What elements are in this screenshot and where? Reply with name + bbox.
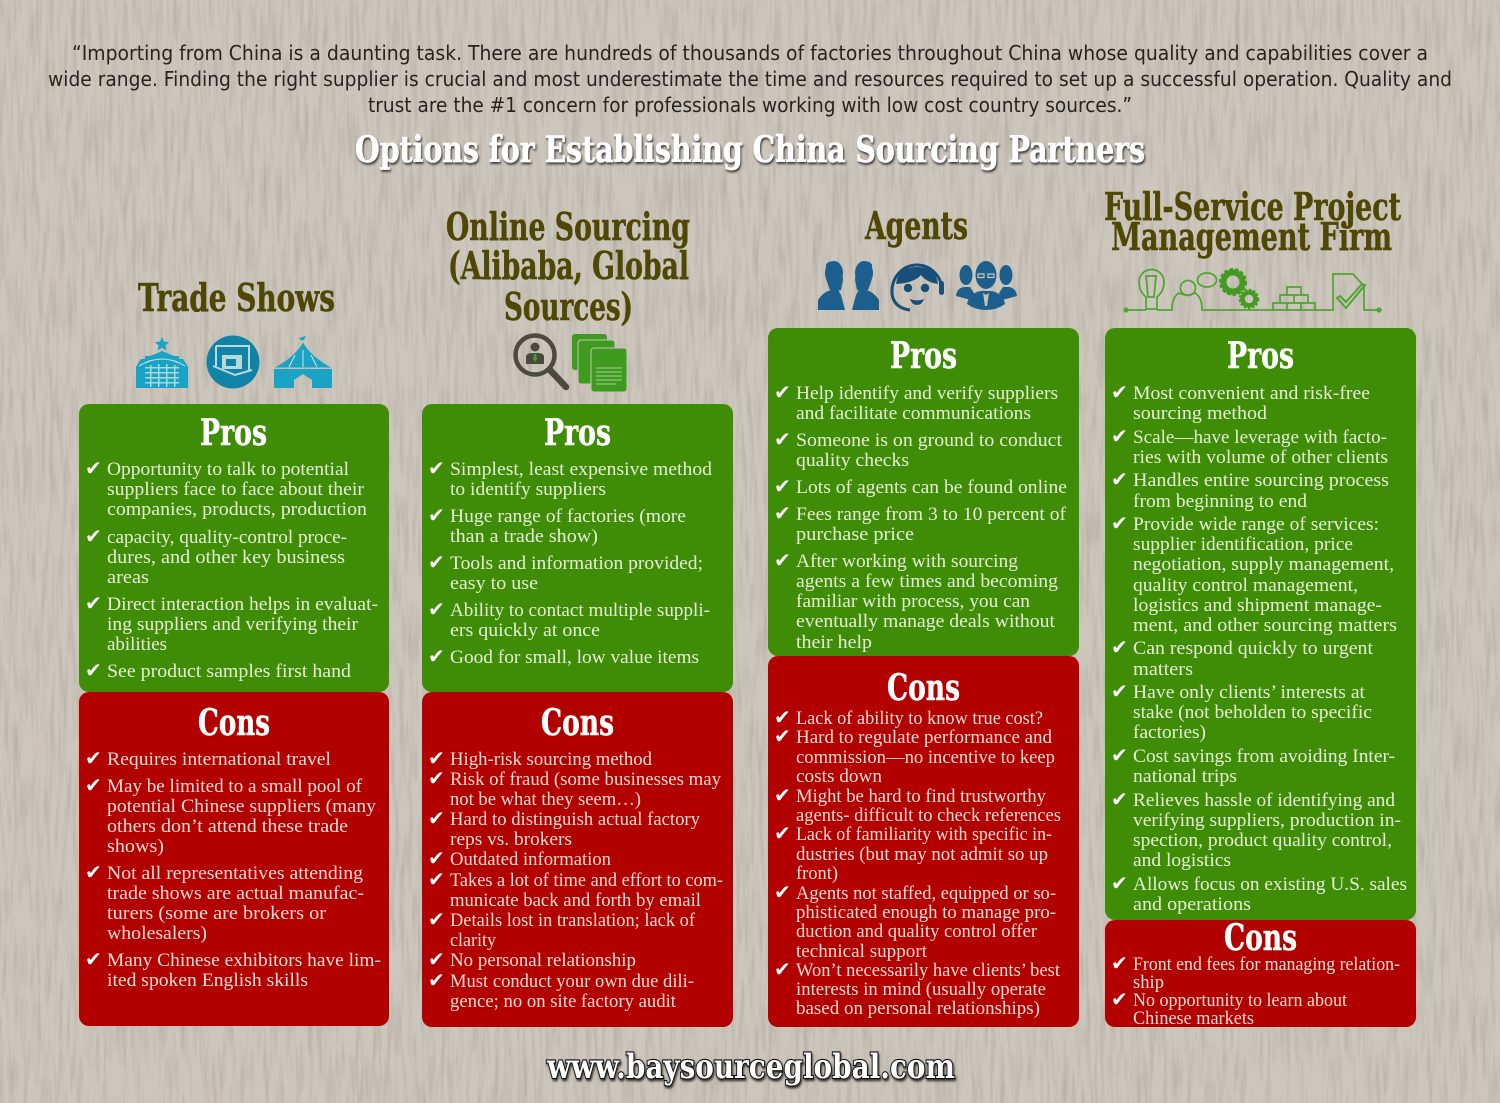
list: Project Management Firm pros: sourcing method [1133,404,1268,424]
list: Project Management Firm pros: ✔ [1111,787,1128,811]
list: Online Sourcing cons: No personal relationship [450,951,636,971]
list: Project Management Firm pros: ✔ [1111,380,1128,404]
list: Online Sourcing cons: ✔ [428,907,445,931]
list: Project Management Firm pros: ries with volume of other clients [1133,448,1388,468]
list: Trade Shows cons: ✔ [85,947,102,971]
list: Online Sourcing pros [428,456,713,668]
list: Project Management Firm pros: Most convenient and risk-free [1133,384,1370,404]
list: Agents pros: ✔ [774,427,791,451]
heading: Cons: Cons [198,702,270,744]
list: Online Sourcing cons: ✔ [428,766,445,790]
list: Agents pros: quality checks [796,451,909,471]
list: Project Management Firm cons: ✔ [1111,987,1128,1011]
list: Agents cons: agents- difficult to check references [796,806,1061,826]
icon: tent [274,336,332,388]
list: Trade Shows pros: suppliers face to face about their [107,480,364,500]
list: Agents pros: ✔ [774,548,791,572]
list: Agents cons: ✔ [774,783,791,807]
list: Agents pros: their help [796,633,872,653]
list: Online Sourcing cons: clarity [450,931,497,951]
icon: magnifier with person [516,336,566,387]
list: Agents cons: ✔ [774,957,791,981]
heading: Pros: Pros [1227,335,1294,377]
list: Trade Shows pros: ✔ [85,658,102,682]
heading: Online Sourcing: Online Sourcing [446,204,690,249]
list: Project Management Firm pros: ment, and other sourcing matters [1133,616,1397,636]
list: Agents cons: ✔ [774,821,791,845]
list: Online Sourcing cons: ✔ [428,846,445,870]
list: Online Sourcing cons: ✔ [428,947,445,971]
list: Trade Shows cons: trade shows are actual manufac- [107,884,364,904]
list: Project Management Firm pros: stake (not beholden to specific [1133,703,1372,723]
panel: Project Management Firm cons [1105,917,1416,1029]
list: Project Management Firm pros: quality control management, [1133,576,1358,596]
list: Project Management Firm pros: Scale—have leverage with facto- [1133,428,1387,448]
list: Agents pros: ✔ [774,474,791,498]
list: Online Sourcing pros: Tools and information provided; [450,554,703,574]
icon: team of three [956,261,1017,310]
list: Project Management Firm pros: ✔ [1111,871,1128,895]
main title: Options for Establishing China Sourcing Partners [355,129,1145,171]
list: Project Management Firm pros: negotiation, supply management, [1133,555,1394,575]
list: Online Sourcing cons: High-risk sourcing method [450,750,653,770]
list: Project Management Firm pros: Relieves hassle of identifying and [1133,791,1396,811]
list: Trade Shows pros: capacity, quality-control proce- [107,528,347,548]
panel: Online Sourcing pros [422,404,733,692]
heading: Online Sourcing [446,204,690,329]
panel: Trade Shows cons [79,692,389,1026]
list: Online Sourcing pros: ✔ [428,597,445,621]
list: Online Sourcing cons: Takes a lot of time and effort to com- [450,871,723,891]
list: Agents pros: agents a few times and becoming [796,572,1058,592]
list: Project Management Firm pros: and logistics [1133,851,1231,871]
icon: two business people [818,261,879,310]
panel: Online Sourcing cons [422,692,733,1027]
list: Agents cons: Won’t necessarily have clients’ best [796,961,1061,981]
list: Agents cons: based on personal relationships) [796,999,1040,1019]
icon: exhibition hall [136,337,188,388]
list: Trade Shows cons: wholesalers) [107,924,207,944]
list: Trade Shows cons [85,746,381,991]
icon: headset operator [892,265,944,310]
list: Agents pros: Someone is on ground to conduct [796,431,1063,451]
list: Online Sourcing pros: ers quickly at once [450,621,600,641]
list: Trade Shows cons: ited spoken English skills [107,971,308,991]
list: Project Management Firm pros: ✔ [1111,635,1128,659]
list: Trade Shows pros: areas [107,568,149,588]
list: Agents cons: costs down [796,767,882,787]
list: Agents cons: ✔ [774,705,791,729]
list: Agents cons [774,705,1061,1019]
list: Online Sourcing pros: to identify suppliers [450,480,606,500]
heading: Trade Shows: Trade Shows [138,275,335,320]
list: Trade Shows cons: May be limited to a small pool of [107,777,363,797]
icon: documents [572,334,627,392]
list: Project Management Firm pros: ✔ [1111,424,1128,448]
list: Project Management Firm pros: and operations [1133,895,1251,915]
heading: Full-Service Project Management Firm [1104,184,1401,259]
list: Online Sourcing cons: not be what they seem…) [450,790,641,810]
list: Trade Shows cons: Not all representatives attending [107,864,363,884]
list: Agents pros [774,380,1067,653]
list: Agents pros: eventually manage deals without [796,612,1056,632]
list: Trade Shows cons: potential Chinese suppliers (many [107,797,377,817]
heading: Cons: Cons [1224,917,1297,959]
list: Agents pros: familiar with process, you can [796,592,1030,612]
list: Agents cons: Might be hard to find trustworthy [796,787,1047,807]
list: Project Management Firm pros: Handles entire sourcing process [1133,471,1389,491]
list: Trade Shows pros: companies, products, production [107,500,367,520]
list: Project Management Firm pros: verifying suppliers, production in- [1133,811,1401,831]
list: Agents cons: front) [796,864,838,884]
list: Agents cons: technical support [796,942,928,962]
list: Trade Shows cons: ✔ [85,773,102,797]
list: Trade Shows pros: ✔ [85,524,102,548]
icon: booth circle [206,336,260,388]
list: Project Management Firm pros: ✔ [1111,743,1128,767]
list: Trade Shows pros: See product samples first hand [107,662,352,682]
list: Trade Shows cons: shows) [107,837,164,857]
panel: Agents pros [768,328,1079,656]
list: Project Management Firm pros: logistics and shipment manage- [1133,596,1382,616]
heading: Cons: Cons [541,702,614,744]
list: Agents cons: Lack of ability to know true cost? [796,709,1043,729]
list: Agents cons: phisticated enough to manage pro- [796,903,1056,923]
list: Trade Shows cons: Requires international travel [107,750,331,770]
list: Online Sourcing cons: gence; no on site factory audit [450,992,677,1012]
list: Project Management Firm pros: supplier identification, price [1133,535,1353,555]
icons: Trade Shows [136,336,332,388]
list: Trade Shows cons: ✔ [85,746,102,770]
heading: Full-Service Project Management Firm: Full-Service Project [1104,184,1401,229]
list: Project Management Firm pros: Can respond quickly to urgent [1133,639,1374,659]
list: Trade Shows cons: others don’t attend these trade [107,817,348,837]
list: Project Management Firm cons: ✔ [1111,951,1128,975]
list: Project Management Firm pros: from beginning to end [1133,492,1308,512]
list: Online Sourcing cons: ✔ [428,806,445,830]
list: Agents pros: Help identify and verify suppliers [796,384,1058,404]
list: Agents cons: commission—no incentive to keep [796,748,1055,768]
list: Agents cons: interests in mind (usually operate [796,980,1046,1000]
list: Trade Shows pros: ✔ [85,456,102,480]
list: Agents pros: ✔ [774,501,791,525]
list: Agents pros: and facilitate communications [796,404,1031,424]
list: Project Management Firm cons: No opportunity to learn about [1133,991,1348,1011]
list: Agents cons: duction and quality control offer [796,922,1037,942]
list: Project Management Firm pros: Allows focus on existing U.S. sales [1133,875,1407,895]
icon: process line with bulb, people, gears, bricks, document [1124,270,1381,312]
list: Agents pros: Fees range from 3 to 10 percent of [796,505,1067,525]
panel: Trade Shows pros [79,404,389,692]
list: Project Management Firm pros: Have only clients’ interests at [1133,683,1366,703]
list: Trade Shows pros: dures, and other key business [107,548,345,568]
list: Online Sourcing cons: ✔ [428,968,445,992]
list: Agents cons: Agents not staffed, equipped or so- [796,884,1056,904]
list: Online Sourcing pros: easy to use [450,574,538,594]
list: Project Management Firm pros: matters [1133,660,1193,680]
list: Online Sourcing pros: Huge range of factories (more [450,507,686,527]
list: Trade Shows cons: Many Chinese exhibitors have lim- [107,951,381,971]
list: Online Sourcing pros: ✔ [428,550,445,574]
list: Trade Shows pros: abilities [107,635,167,655]
list: Online Sourcing cons: Outdated information [450,850,611,870]
list: Trade Shows cons: ✔ [85,860,102,884]
icons: Agents [818,261,1017,310]
list: Online Sourcing cons [428,746,723,1012]
list: Project Management Firm pros [1111,380,1407,915]
heading: Pros: Pros [200,412,267,454]
list: Online Sourcing cons: Hard to distinguish actual factory [450,810,701,830]
list: Project Management Firm pros: Cost savings from avoiding Inter- [1133,747,1395,767]
list: Online Sourcing cons: municate back and forth by email [450,891,701,911]
list: Agents cons: Lack of familiarity with specific in- [796,825,1052,845]
list: Online Sourcing cons: Details lost in translation; lack of [450,911,696,931]
list: Agents cons: dustries (but may not admit so up [796,845,1048,865]
list: Online Sourcing pros: ✔ [428,644,445,668]
list: Online Sourcing pros: Simplest, least expensive method [450,460,713,480]
heading: Agents: Agents [864,203,968,248]
list: Trade Shows pros: Opportunity to talk to potential [107,460,349,480]
heading: Pros: Pros [544,412,611,454]
list: Project Management Firm pros: national trips [1133,767,1237,787]
list: Agents pros: ✔ [774,380,791,404]
list: Project Management Firm cons: Front end fees for managing relation- [1133,955,1400,975]
heading: Online Sourcing: (Alibaba, Global [448,243,689,288]
list: Online Sourcing pros: ✔ [428,503,445,527]
list: Project Management Firm pros: Provide wide range of services: [1133,515,1379,535]
list: Agents cons: Hard to regulate performance and [796,728,1053,748]
list: Agents pros: After working with sourcing [796,552,1018,572]
list: Project Management Firm pros: ✔ [1111,511,1128,535]
list: Project Management Firm pros: ✔ [1111,467,1128,491]
website footer: www.baysourceglobal.com [546,1047,955,1087]
list: Online Sourcing pros: Good for small, low value items [450,648,699,668]
icons: Online Sourcing [516,334,627,392]
list: Project Management Firm cons [1111,951,1400,1029]
list: Online Sourcing pros: ✔ [428,456,445,480]
list: Online Sourcing cons: ✔ [428,746,445,770]
list: Trade Shows pros: ing suppliers and verifying their [107,615,358,635]
list: Agents cons: ✔ [774,724,791,748]
list: Online Sourcing cons: Must conduct your own due dili- [450,972,694,992]
list: Agents cons: ✔ [774,880,791,904]
panel: Project Management Firm pros [1105,328,1416,920]
list: Trade Shows cons: turers (some are brokers or [107,904,326,924]
list: Online Sourcing cons: ✔ [428,867,445,891]
intro quote: trust are the #1 concern for professionals working with low cost country sources.” [368,93,1132,117]
list: Trade Shows pros: Direct interaction helps in evaluat- [107,595,378,615]
heading: Full-Service Project Management Firm: Management Firm [1111,214,1392,259]
list: Project Management Firm pros: spection, product quality control, [1133,831,1392,851]
intro quote [48,41,1452,117]
list: Online Sourcing pros: Ability to contact multiple suppli- [450,601,710,621]
list: Trade Shows pros [85,456,378,682]
heading: Cons: Cons [887,667,960,709]
list: Agents pros: purchase price [796,525,914,545]
intro quote: “Importing from China is a daunting task. There are hundreds of thousands of factories throughout China whose quality and capabilities cover a [72,41,1428,65]
list: Agents pros: Lots of agents can be found online [796,478,1067,498]
list: Online Sourcing cons: Risk of fraud (some businesses may [450,770,722,790]
list: Project Management Firm cons: Chinese markets [1133,1009,1254,1029]
list: Trade Shows pros: ✔ [85,591,102,615]
list: Online Sourcing cons: reps vs. brokers [450,830,572,850]
list: Online Sourcing pros: than a trade show) [450,527,598,547]
heading: Online Sourcing: Sources) [504,284,633,329]
list: Project Management Firm cons: ship [1133,973,1164,993]
list: Project Management Firm pros: ✔ [1111,679,1128,703]
heading: Pros: Pros [890,335,957,377]
list: Project Management Firm pros: factories) [1133,723,1206,743]
panel: Agents cons [768,656,1079,1027]
